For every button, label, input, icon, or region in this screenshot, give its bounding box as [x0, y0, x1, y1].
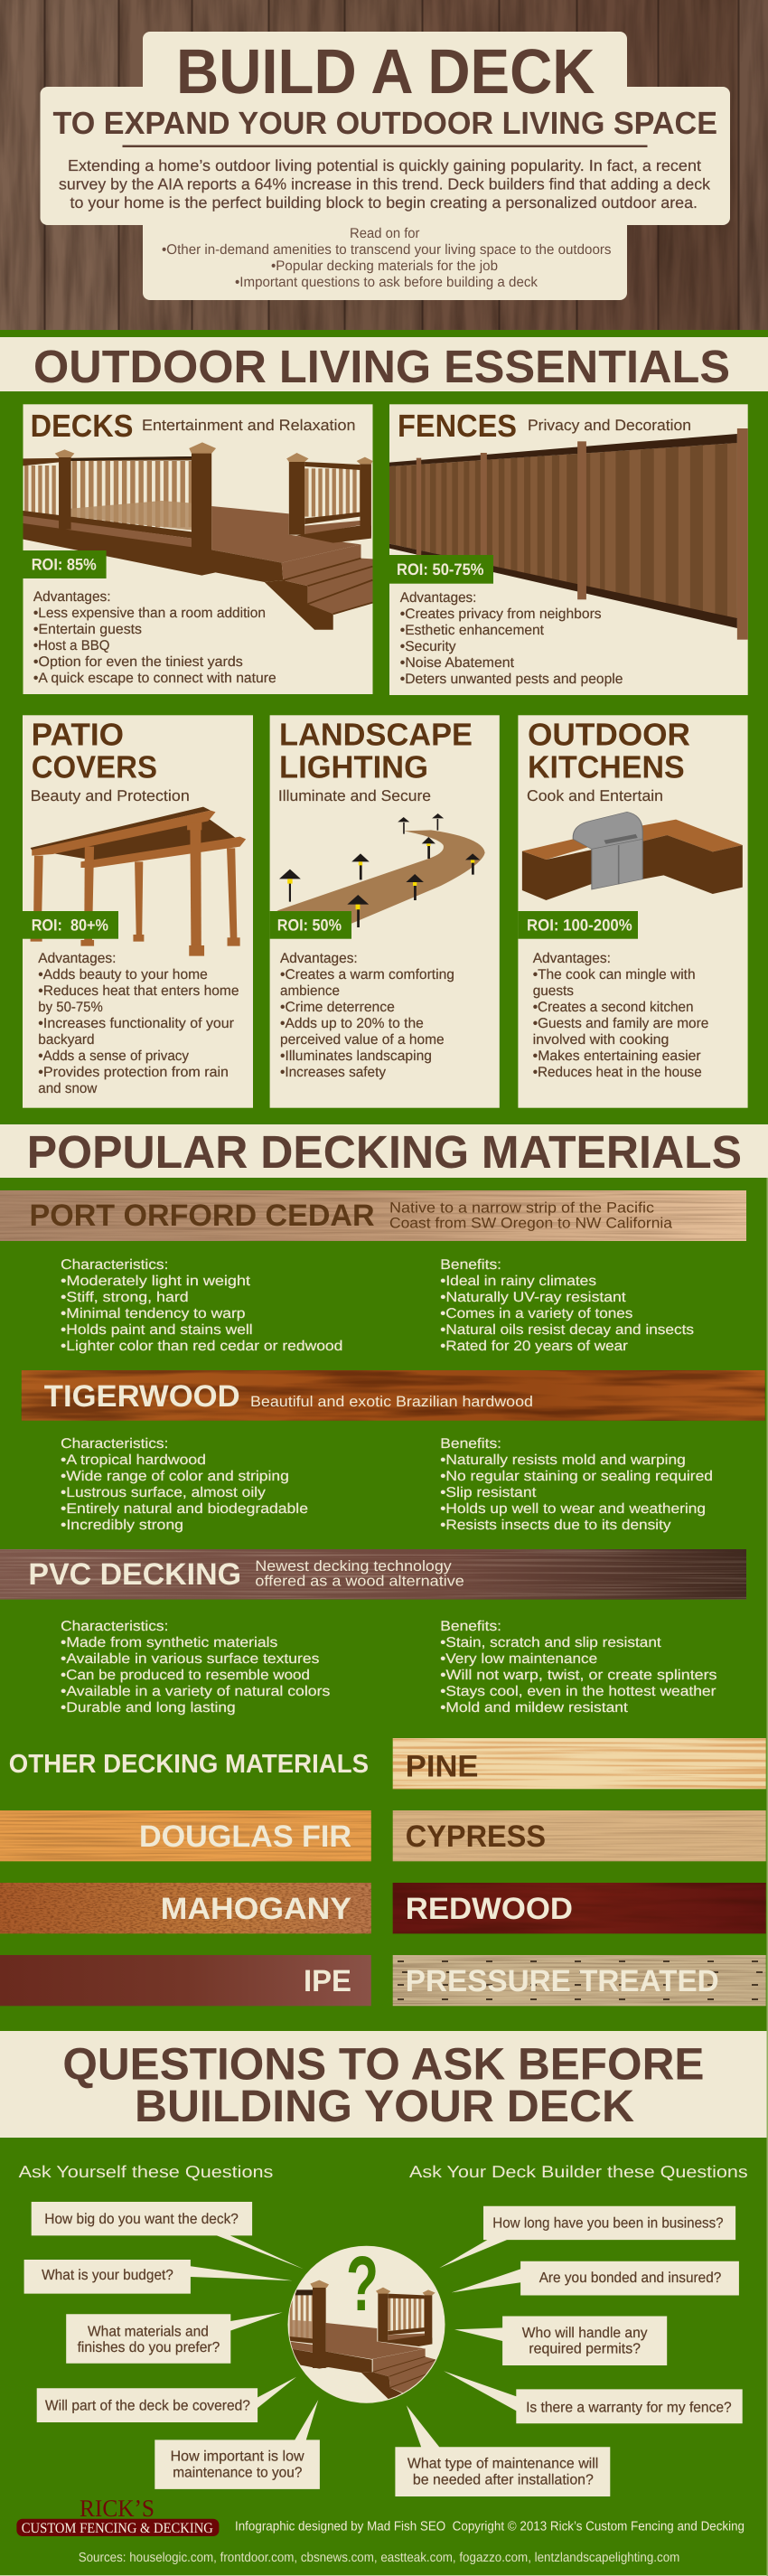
material banner: tigerwood: [22, 1370, 765, 1421]
sources line: Sources: houselogic.com, frontdoor.com, cbsnews.com, eastteak.com, fogazzo.com, lentzlandscapelighting.com: [79, 2551, 679, 2565]
roi tag: [270, 911, 351, 939]
callout: covered: [37, 2377, 296, 2422]
roi tag: [23, 550, 107, 578]
intro paragraph: to your home is the perfect building block to begin creating a personalized outdoor area.: [70, 193, 698, 212]
intro paragraph: [59, 156, 710, 212]
callout: maintenance after installation: be needed after installation?: [413, 2473, 594, 2487]
callout: low maintenance: [155, 2400, 320, 2489]
illustration: outdoor kitchen: [522, 812, 743, 900]
advantages list: •Illuminates landscaping: [280, 1048, 432, 1064]
panel: outdoor kitchens: [518, 715, 748, 1108]
callout: bonded and insured: [452, 2261, 739, 2296]
cedar characteristics: Characteristics:: [61, 1257, 168, 1273]
pvc benefits: •Stain, scratch and slip resistant: [440, 1635, 661, 1650]
heading: decks: DECKS: [31, 409, 133, 444]
heading: fences: FENCES: [398, 409, 517, 444]
roi tag: [518, 911, 638, 939]
advantages list: •Increases functionality of your: [38, 1016, 234, 1031]
read on list: [162, 226, 612, 290]
panel: landscape lighting: [270, 715, 500, 1108]
callout: permits: [454, 2316, 667, 2365]
callout: low maintenance: maintenance to you?: [173, 2465, 302, 2480]
advantages list: ambience: [280, 983, 340, 999]
intro paragraph: survey by the AIA reports a 64% increase in this trend. Deck builders find that adding a deck: [59, 175, 710, 193]
heading: patio covers: COVERS: [32, 750, 157, 785]
column heading: ask yourself: Ask Yourself these Questions: [19, 2162, 273, 2181]
intro paragraph: Extending a home’s outdoor living potential is quickly gaining popularity. In fact, a recent: [68, 156, 701, 174]
subheading: Illuminate and Secure: [278, 787, 431, 804]
cedar characteristics: •Stiff, strong, hard: [61, 1290, 189, 1305]
heading: outdoor kitchens: [528, 717, 690, 785]
material: mahogany: MAHOGANY: [161, 1892, 351, 1926]
cedar characteristics: •Holds paint and stains well: [61, 1322, 253, 1338]
heading: outdoor kitchens: KITCHENS: [528, 750, 685, 785]
callout: deck size: [32, 2202, 304, 2269]
heading: landscape lighting: LIGHTING: [279, 750, 428, 785]
tigerwood characteristics: •Wide range of color and striping: [61, 1469, 289, 1484]
subheading: Entertainment and Relaxation: [142, 417, 356, 434]
material banner: tigerwood: Beautiful and exotic Brazilian hardwood: [250, 1394, 533, 1410]
illustration: path with lights: [276, 813, 485, 927]
pvc characteristics: Characteristics:: [61, 1619, 168, 1634]
material: douglas fir: DOUGLAS FIR: [139, 1819, 351, 1854]
tigerwood benefits: •Slip resistant: [440, 1485, 537, 1500]
advantages list: •Security: [400, 639, 456, 654]
advantages list: •A quick escape to connect with nature: [33, 671, 276, 686]
cedar characteristics: •Minimal tendency to warp: [61, 1306, 246, 1321]
logo: rick's custom fencing and decking: CUSTOM FENCING & DECKING: [22, 2521, 213, 2536]
advantages list: •Crime deterrence: [280, 1000, 395, 1015]
subheading: Cook and Entertain: [527, 787, 663, 804]
advantages list: •Noise Abatement: [400, 655, 515, 671]
advantages list: involved with cooking: [533, 1032, 669, 1048]
material banner: pvc decking: Newest decking technology: [255, 1558, 453, 1575]
callout: budget: [24, 2260, 293, 2294]
material: douglas fir: [0, 1810, 371, 1861]
material banner: port orford cedar: Coast from SW Oregon to NW California: [389, 1216, 673, 1232]
advantages list: Advantages:: [400, 590, 476, 606]
tigerwood characteristics: [61, 1436, 308, 1533]
advantages list: •Entertain guests: [33, 622, 142, 637]
callout: bonded and insured: Are you bonded and insured?: [539, 2270, 721, 2286]
centre circle with deck and question mark: [287, 2241, 445, 2403]
heading: landscape lighting: LANDSCAPE: [279, 717, 473, 752]
cedar benefits: •Rated for 20 years of wear: [440, 1339, 628, 1354]
material: redwood: [393, 1883, 766, 1933]
tigerwood benefits: •Naturally resists mold and warping: [440, 1453, 686, 1468]
cedar benefits: •Naturally UV-ray resistant: [440, 1290, 626, 1305]
cedar characteristics: •Moderately light in weight: [61, 1274, 251, 1289]
advantages list: Advantages:: [533, 951, 611, 966]
material banner: tigerwood: TIGERWOOD: [44, 1379, 240, 1414]
advantages list: Advantages:: [38, 951, 116, 966]
advantages list: •Adds beauty to your home: [38, 967, 208, 982]
callout: warranty: Is there a warranty for my fence?: [526, 2400, 732, 2415]
read on list: •Popular decking materials for the job: [271, 259, 498, 274]
pvc characteristics: •Can be produced to resemble wood: [61, 1668, 310, 1683]
logo: rick's custom fencing and decking: RICK’S: [80, 2495, 155, 2522]
tigerwood benefits: •Holds up well to wear and weathering: [440, 1501, 706, 1517]
illustration: pergola: [31, 807, 246, 956]
callout: how long in business: [439, 2206, 735, 2268]
material: mahogany: [0, 1883, 371, 1933]
material: cypress: [393, 1810, 766, 1861]
advantages list: •Makes entertaining easier: [533, 1048, 701, 1064]
header: wood background: [0, 0, 768, 330]
advantages list: •Adds a sense of privacy: [38, 1048, 189, 1064]
roi tag: ROI: 100-200%: [527, 916, 632, 934]
section heading: questions: [0, 2031, 768, 2138]
callout: how long in business: How long have you been in business?: [492, 2216, 724, 2231]
advantages list: •Creates a second kitchen: [533, 1000, 694, 1015]
advantages list: •Less expensive than a room addition: [33, 606, 266, 621]
advantages list: •Host a BBQ: [33, 638, 109, 653]
advantages list: •Increases safety: [280, 1065, 386, 1080]
callout: materials: [66, 2312, 283, 2364]
cedar benefits: [440, 1257, 694, 1354]
material: pressure treated: [393, 1955, 766, 2006]
roi tag: ROI: 85%: [32, 556, 97, 574]
pvc benefits: •Stays cool, even in the hottest weather: [440, 1684, 716, 1699]
tigerwood characteristics: •A tropical hardwood: [61, 1453, 206, 1468]
header: title panel: [40, 32, 730, 300]
cedar characteristics: [61, 1257, 342, 1354]
advantages list: [280, 951, 454, 1080]
pvc benefits: •Will not warp, twist, or create splinters: [440, 1668, 717, 1683]
cedar benefits: •Ideal in rainy climates: [440, 1274, 596, 1289]
advantages list: perceived value of a home: [280, 1032, 445, 1048]
material banner: pvc decking: [0, 1549, 746, 1600]
pvc benefits: Benefits:: [440, 1619, 501, 1634]
pvc benefits: •Mold and mildew resistant: [440, 1700, 629, 1716]
heading: landscape lighting: [279, 717, 473, 785]
subheading: Privacy and Decoration: [528, 417, 691, 434]
material banner: pvc decking: PVC DECKING: [28, 1557, 241, 1592]
callout: warranty: [444, 2371, 743, 2423]
read on list: •Other in-demand amenities to transcend your living space to the outdoors: [162, 242, 612, 258]
advantages list: Advantages:: [33, 589, 110, 605]
callout: covered: Will part of the deck be covered?: [45, 2398, 250, 2413]
material: pressure treated: PRESSURE TREATED: [406, 1964, 719, 1998]
callout: low maintenance: How important is low: [171, 2449, 304, 2464]
material: ipe: IPE: [304, 1964, 351, 1998]
callout: permits: required permits?: [529, 2342, 641, 2357]
logo: rick's custom fencing and decking: [16, 2495, 219, 2536]
callout: budget: What is your budget?: [42, 2268, 173, 2283]
heading: outdoor kitchens: OUTDOOR: [528, 717, 690, 752]
roi tag: [389, 555, 493, 584]
roi tag: ROI: 50%: [277, 916, 342, 934]
title: build a deck: BUILD A DECK: [176, 36, 595, 107]
tigerwood characteristics: Characteristics:: [61, 1436, 168, 1452]
advantages list: •Guests and family are more: [533, 1016, 708, 1031]
material banner: port orford cedar: Native to a narrow strip of the Pacific: [389, 1200, 654, 1217]
advantages list: •Deters unwanted pests and people: [400, 672, 623, 687]
section heading: outdoor living essentials: OUTDOOR LIVING ESSENTIALS: [33, 341, 730, 392]
material: pine: PINE: [406, 1749, 479, 1783]
advantages list: •Reduces heat in the house: [533, 1065, 702, 1080]
advantages list: •Adds up to 20% to the: [280, 1016, 424, 1031]
illustration: fence: [389, 428, 748, 644]
advantages list: •Esthetic enhancement: [400, 623, 545, 638]
tigerwood characteristics: •Incredibly strong: [61, 1518, 183, 1533]
subheading: Beauty and Protection: [31, 787, 190, 804]
read on list: Read on for: [350, 226, 419, 241]
pvc benefits: •Very low maintenance: [440, 1651, 597, 1667]
heading: patio covers: [32, 717, 157, 785]
advantages list: •Creates a warm comforting: [280, 967, 454, 982]
material: pine: [393, 1738, 766, 1789]
heading: patio covers: PATIO: [32, 717, 124, 752]
advantages list: Advantages:: [280, 951, 358, 966]
pvc characteristics: [61, 1619, 331, 1716]
tigerwood benefits: [440, 1436, 713, 1533]
cedar benefits: Benefits:: [440, 1257, 501, 1273]
cedar benefits: •Natural oils resist decay and insects: [440, 1322, 694, 1338]
panel: fences: [389, 404, 748, 695]
tigerwood benefits: •No regular staining or sealing required: [440, 1469, 713, 1484]
advantages list: [33, 589, 276, 686]
roi tag: ROI: 50-75%: [397, 560, 484, 578]
advantages list: •Creates privacy from neighbors: [400, 606, 602, 622]
question mark: ?: [346, 2241, 379, 2327]
cedar benefits: •Comes in a variety of tones: [440, 1306, 633, 1321]
subtitle: TO EXPAND YOUR OUTDOOR LIVING SPACE: [52, 106, 717, 141]
read on list: •Important questions to ask before building a deck: [235, 275, 538, 290]
pvc characteristics: •Available in various surface textures: [61, 1651, 320, 1667]
advantages list: [400, 590, 623, 687]
pvc characteristics: •Made from synthetic materials: [61, 1635, 278, 1650]
section heading: popular decking materials: POPULAR DECKING MATERIALS: [27, 1126, 742, 1178]
heading: other decking materials: OTHER DECKING MATERIALS: [9, 1750, 369, 1779]
advantages list: •The cook can mingle with: [533, 967, 696, 982]
advantages list: guests: [533, 983, 574, 999]
material: ipe: [0, 1955, 371, 2006]
tigerwood characteristics: •Lustrous surface, almost oily: [61, 1485, 266, 1500]
panel: patio covers: [23, 715, 253, 1108]
pvc benefits: [440, 1619, 717, 1716]
callout: maintenance after installation: [395, 2405, 610, 2496]
advantages list: and snow: [38, 1081, 98, 1096]
panel: decks: [23, 404, 373, 694]
section heading: questions: BUILDING YOUR DECK: [135, 2081, 634, 2131]
tigerwood benefits: Benefits:: [440, 1436, 501, 1452]
illustration: deck: [23, 442, 373, 630]
advantages list: •Reduces heat that enters home: [38, 983, 239, 999]
material: cypress: CYPRESS: [406, 1819, 546, 1854]
material banner: port orford cedar: PORT ORFORD CEDAR: [29, 1199, 375, 1233]
advantages list: backyard: [38, 1032, 95, 1048]
callout: materials: finishes do you prefer?: [78, 2340, 220, 2355]
pvc characteristics: •Durable and long lasting: [61, 1700, 236, 1716]
advantages list: [38, 951, 239, 1096]
roi tag: [23, 911, 118, 939]
material banner: port orford cedar: [0, 1190, 746, 1241]
advantages list: [533, 951, 708, 1080]
material banner: pvc decking: offered as a wood alternative: [255, 1574, 464, 1590]
advantages list: by 50-75%: [38, 1000, 103, 1015]
section heading: questions: QUESTIONS TO ASK BEFORE: [62, 2038, 704, 2089]
roi tag: ROI: 80+%: [32, 916, 108, 934]
cedar characteristics: •Lighter color than red cedar or redwood: [61, 1339, 342, 1354]
column heading: ask your deck builder: Ask Your Deck Builder these Questions: [409, 2162, 748, 2181]
advantages list: •Provides protection from rain: [38, 1065, 229, 1080]
tigerwood benefits: •Resists insects due to its density: [440, 1518, 671, 1533]
pvc characteristics: •Available in a variety of natural colors: [61, 1684, 331, 1699]
callout: maintenance after installation: What type of maintenance will: [407, 2457, 598, 2472]
callout: materials: What materials and: [88, 2324, 209, 2339]
tigerwood characteristics: •Entirely natural and biodegradable: [61, 1501, 308, 1517]
callout: deck size: How big do you want the deck?: [44, 2212, 239, 2227]
advantages list: •Option for even the tiniest yards: [33, 654, 243, 670]
material: redwood: REDWOOD: [406, 1892, 573, 1926]
callout: permits: Who will handle any: [522, 2326, 648, 2341]
